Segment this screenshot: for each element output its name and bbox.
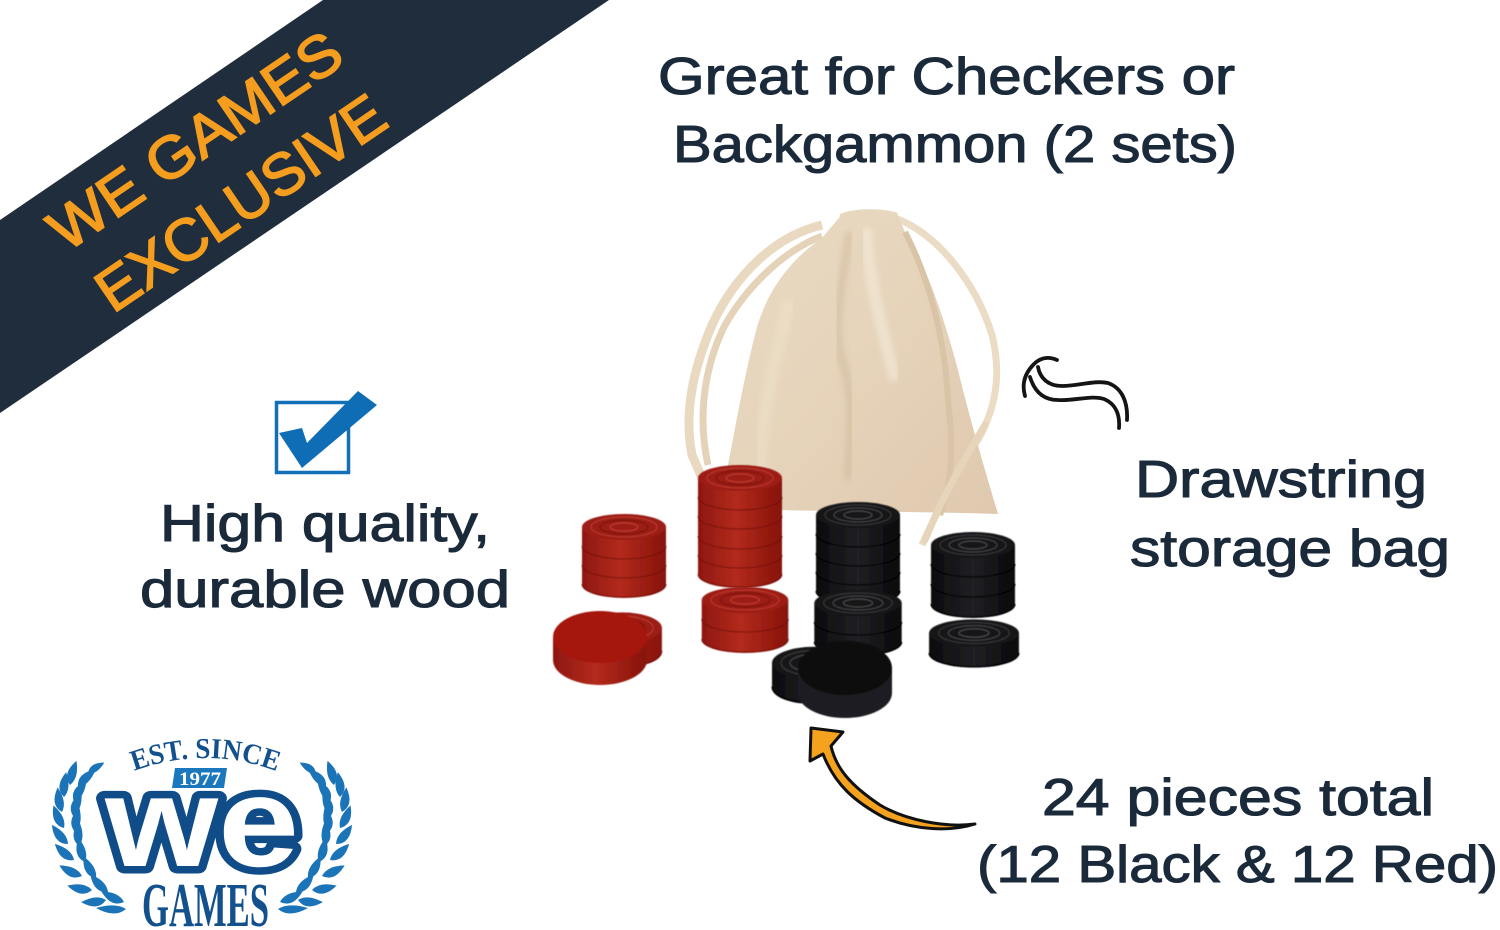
text: drawstring storage bag bbox=[1130, 451, 1450, 578]
text: drawstring storage bag: storage bag bbox=[1130, 520, 1450, 578]
black checkers tall stack bbox=[816, 502, 900, 605]
red loose checkers bbox=[553, 611, 662, 685]
logo: WE Games est. 1977 bbox=[52, 738, 352, 930]
text: high quality durable wood: High quality, bbox=[160, 495, 490, 553]
black checkers short stack bbox=[814, 590, 902, 656]
red checkers left stack bbox=[582, 514, 666, 598]
heading: great for checkers or backgammon bbox=[658, 48, 1237, 174]
arrow: orange curved to checkers bbox=[810, 728, 975, 829]
black checkers right stack bbox=[931, 532, 1015, 618]
red checkers short stack bbox=[702, 587, 788, 653]
icon: blue checkbox bbox=[276, 391, 377, 472]
text: high quality durable wood bbox=[140, 495, 510, 619]
black single checker right bbox=[929, 619, 1019, 668]
text: high quality durable wood: durable wood bbox=[140, 561, 510, 619]
black loose checkers bbox=[772, 641, 892, 718]
banner: WE Games Exclusive bbox=[0, 0, 609, 413]
text: 24 pieces total bbox=[977, 769, 1498, 894]
red checkers tall stack bbox=[698, 465, 782, 588]
heading: great for checkers or backgammon: Backgammon (2 sets) bbox=[673, 116, 1237, 174]
logo: WE Games est. 1977: 1977 bbox=[179, 769, 222, 790]
text: 24 pieces total: 24 pieces total bbox=[1042, 769, 1434, 827]
drawstring bag bbox=[689, 209, 998, 545]
logo: WE Games est. 1977: EST. SINCE bbox=[128, 738, 280, 771]
logo: WE Games est. 1977: we bbox=[104, 751, 299, 894]
banner: WE Games Exclusive: WE GAMES bbox=[36, 18, 355, 264]
arrow: wavy black to bag bbox=[1024, 358, 1127, 428]
text: 24 pieces total: (12 Black & 12 Red) bbox=[977, 836, 1498, 894]
banner: WE Games Exclusive: EXCLUSIVE bbox=[83, 81, 398, 325]
text: drawstring storage bag: Drawstring bbox=[1135, 451, 1427, 509]
heading: great for checkers or backgammon: Great for Checkers or bbox=[658, 48, 1235, 106]
